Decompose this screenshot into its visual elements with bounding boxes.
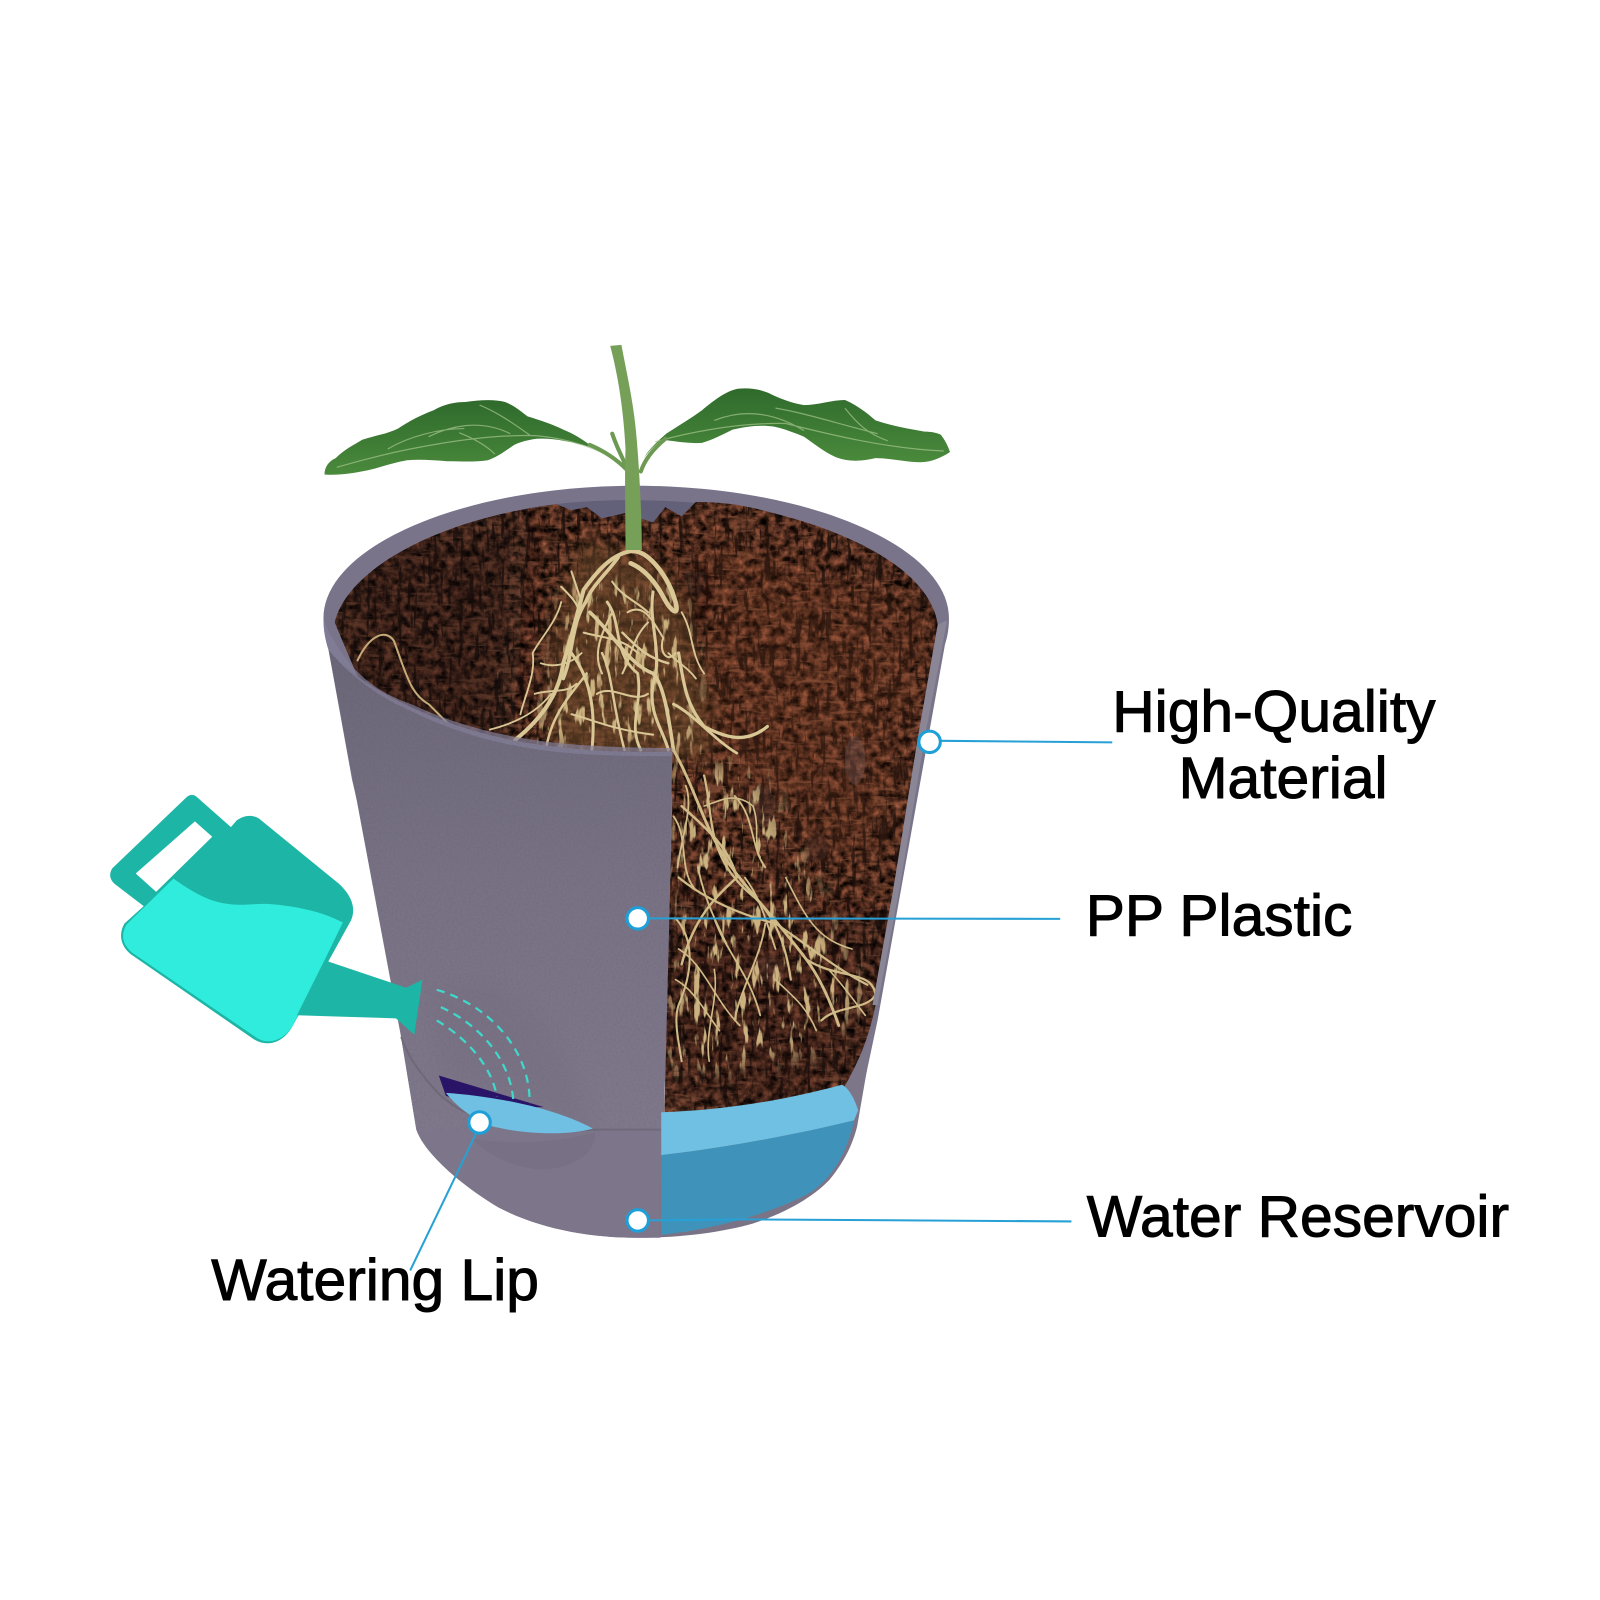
callout: high-quality material (919, 680, 1436, 811)
right leaf veins (655, 408, 944, 451)
reservoir water body (661, 1120, 854, 1235)
callout: watering lip (211, 1112, 539, 1313)
callout: pp plastic: PP Plastic (1086, 884, 1352, 949)
root fibre texture (531, 577, 867, 1071)
reservoir water top (661, 1085, 858, 1155)
callout: pp plastic (627, 884, 1352, 949)
right leaf (644, 388, 950, 462)
watering can (110, 795, 422, 1043)
front of saucer (416, 1130, 661, 1238)
lower soil shade (663, 898, 888, 1112)
wall top band (323, 618, 672, 756)
root ball soil (550, 541, 714, 760)
watering lip recess shading (434, 984, 592, 1129)
plant (324, 345, 950, 550)
soil fibres light (327, 490, 949, 1122)
soil warm right (704, 531, 939, 878)
wall texture (327, 643, 673, 1245)
stem (610, 345, 642, 550)
callout: watering lip: Watering Lip (211, 1248, 539, 1313)
dark cavity (439, 1076, 544, 1107)
water stream arcs (437, 990, 530, 1103)
water in lip (446, 1093, 593, 1133)
upper root ball (490, 551, 767, 753)
inner rim shadow (510, 500, 796, 536)
can body (121, 816, 353, 1043)
can water (123, 879, 343, 1041)
watering lip opening (439, 1076, 593, 1133)
leaf petioles (590, 434, 665, 471)
left leaf (324, 400, 619, 475)
plant pot cutaway illustration (323, 486, 949, 1245)
left leaf veins (337, 405, 619, 467)
callout: water reservoir (627, 1185, 1509, 1250)
soil chunks (729, 514, 865, 983)
can handle (110, 795, 233, 913)
soil texture (327, 490, 949, 1122)
seam (401, 1037, 661, 1131)
lower roots (673, 750, 876, 1061)
callout: high-quality material: High-Quality (1112, 680, 1436, 745)
dark hollow by root ball (674, 564, 715, 628)
pot back rim (323, 486, 949, 1127)
water reservoir (661, 1085, 858, 1235)
saucer base (401, 1020, 876, 1238)
saucer bump (472, 1133, 595, 1169)
soil shading dark left (327, 510, 531, 776)
callout: water reservoir: Water Reservoir (1087, 1185, 1509, 1250)
soil (327, 490, 949, 1122)
stray root left (357, 635, 449, 724)
front wall (323, 618, 673, 1245)
callout: high-quality material: Material (1179, 746, 1388, 811)
soil fibres dark (327, 490, 949, 1122)
can spout (297, 960, 422, 1035)
right pot sliver (872, 620, 947, 1005)
